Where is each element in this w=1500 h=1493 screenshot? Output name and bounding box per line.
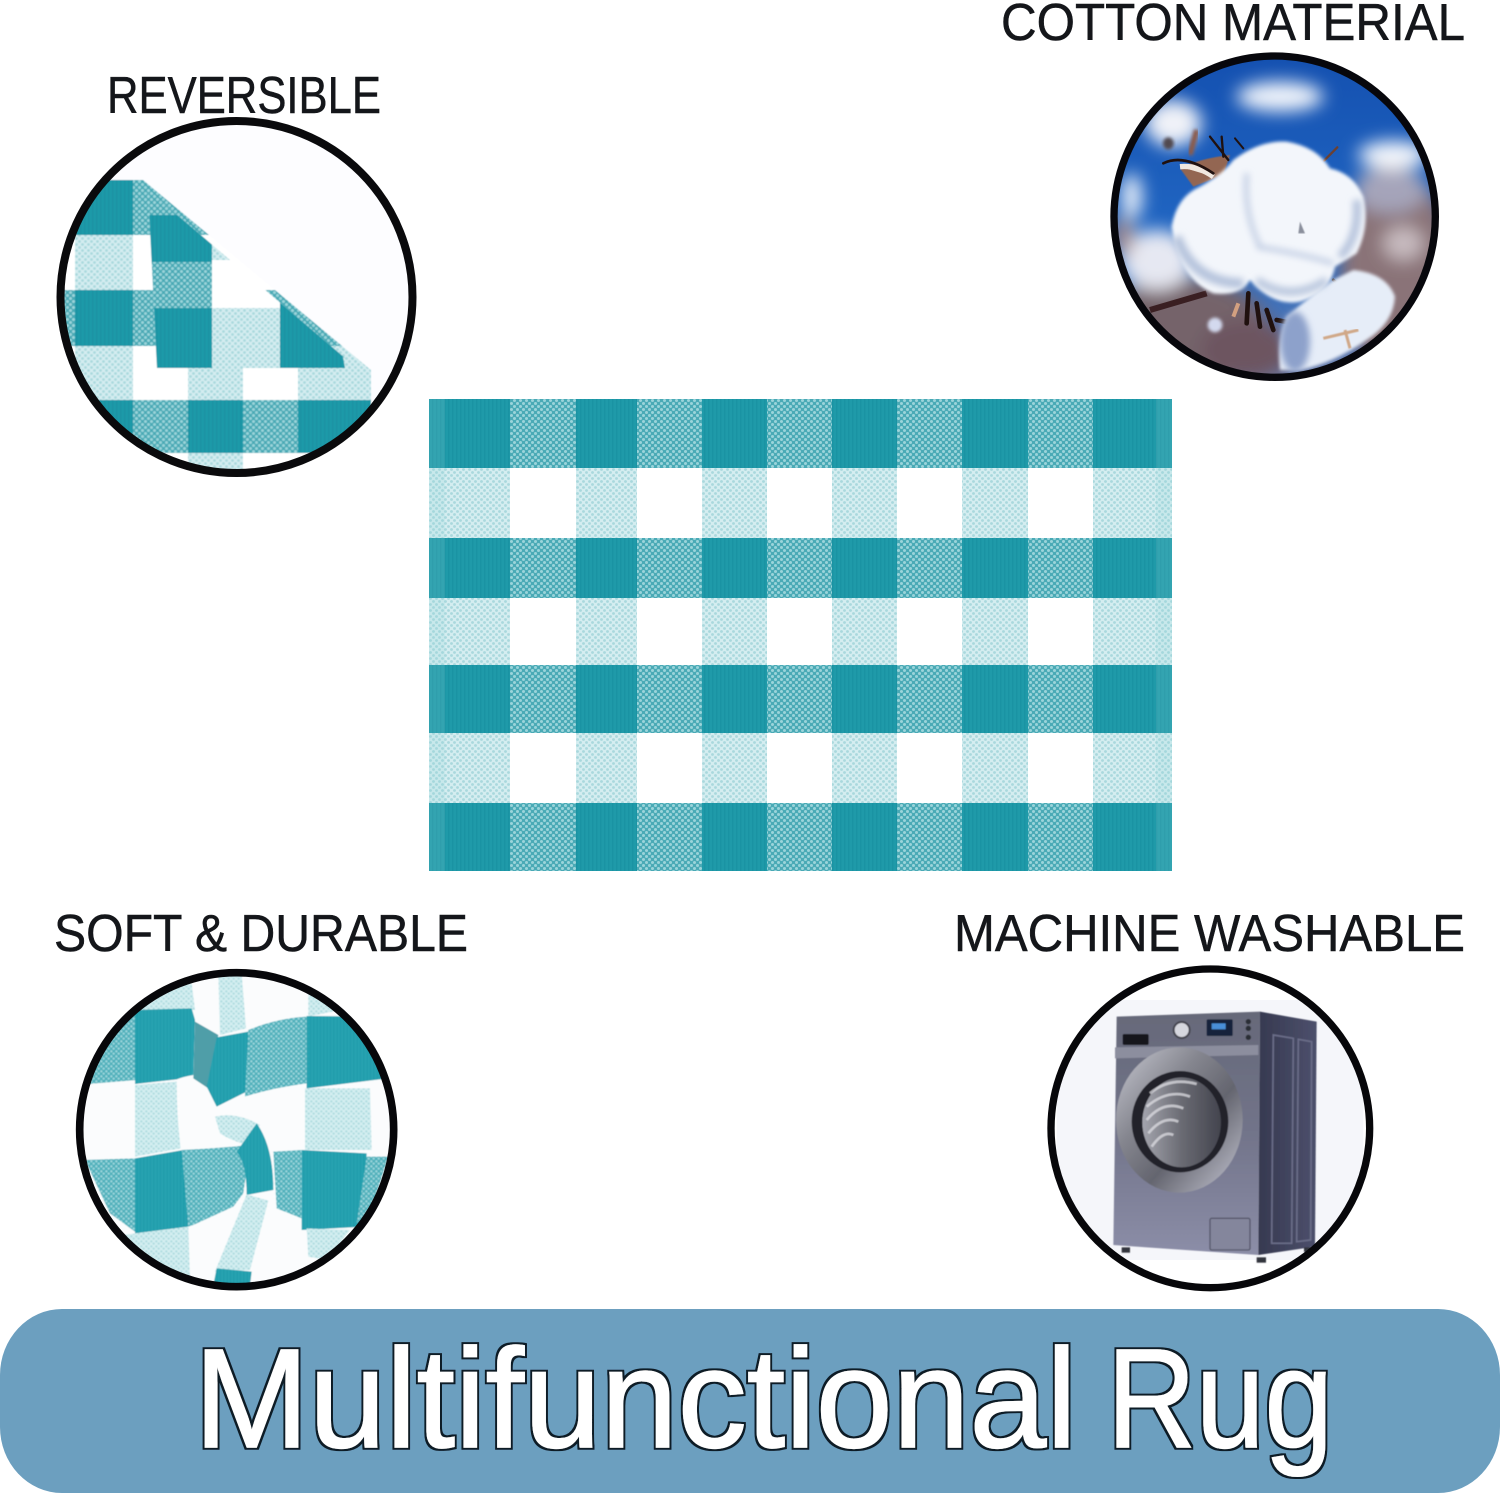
door (1116, 1047, 1243, 1193)
panel: reversible feature (56, 67, 418, 483)
circle frame (1114, 56, 1435, 377)
stems and bracts (1150, 293, 1207, 310)
banner (0, 1309, 1500, 1493)
photo: twisted rug fabric (77, 970, 397, 1290)
second boll (1279, 270, 1395, 370)
fold flap (148, 192, 346, 369)
photo: front-loading washing machine (1051, 969, 1370, 1288)
banner title: Multifunctional (194, 1319, 1077, 1477)
banner title: Rug (1107, 1319, 1333, 1477)
control panel (1123, 1034, 1149, 1045)
circle frame (1051, 969, 1370, 1288)
circle frame (80, 973, 394, 1287)
heading: soft and durable: SOFT & DURABLE (54, 905, 468, 963)
filter hatch (1210, 1218, 1250, 1250)
panel: soft and durable feature (54, 905, 468, 1290)
main boll (1172, 142, 1366, 302)
washer body (1113, 1012, 1260, 1255)
heading: machine washable: MACHINE WASHABLE (954, 905, 1465, 963)
panel: cotton material feature (1001, 0, 1465, 390)
photo: cotton boll against sky (1097, 53, 1453, 390)
photo: folded-over rug corner (64, 179, 372, 469)
circle frame (60, 121, 412, 473)
main rug image (429, 399, 1172, 871)
heading: reversible: REVERSIBLE (107, 67, 381, 125)
panel: machine washable feature (954, 905, 1465, 1288)
